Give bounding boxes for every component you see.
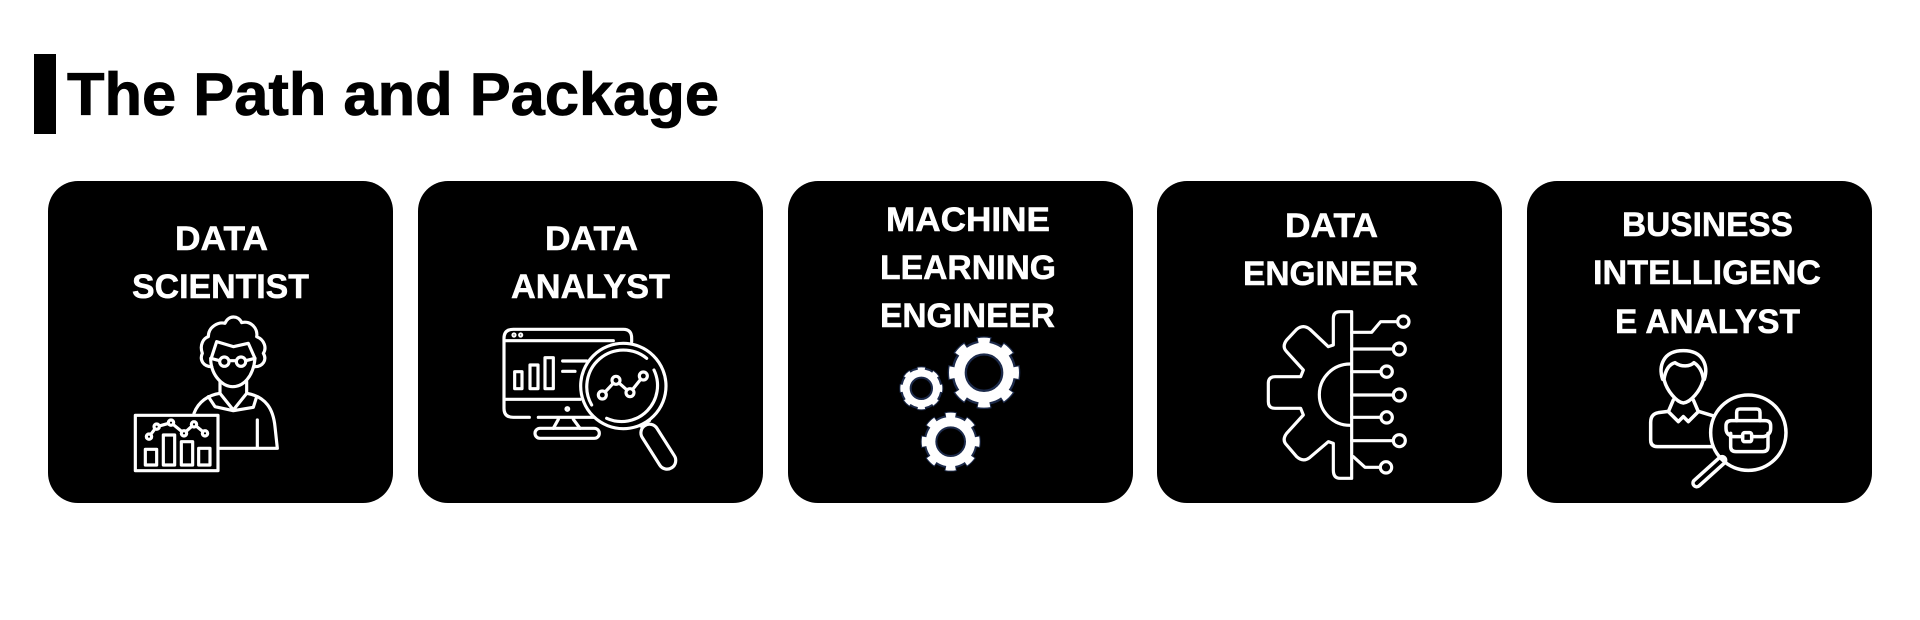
- card heading: [1593, 206, 1821, 341]
- card heading: [1243, 207, 1418, 293]
- panel: machine learning engineer: [788, 181, 1133, 503]
- card background: [418, 181, 763, 503]
- card heading: DATA: [545, 220, 638, 258]
- card heading: MACHINE: [886, 201, 1050, 239]
- icon: scientist with chart board: [135, 317, 277, 471]
- card heading: SCIENTIST: [132, 268, 309, 306]
- card heading: ENGINEER: [880, 297, 1055, 335]
- card heading: ENGINEER: [1243, 255, 1418, 293]
- title accent bar: [34, 54, 56, 134]
- card background: [1527, 181, 1872, 503]
- card heading: BUSINESS: [1622, 206, 1793, 244]
- card heading: ANALYST: [511, 268, 670, 306]
- card heading: LEARNING: [880, 249, 1056, 287]
- card heading: [132, 220, 309, 306]
- large gear: [952, 341, 1016, 404]
- card background: [788, 181, 1133, 503]
- small gear: [903, 370, 940, 407]
- card background: [48, 181, 393, 503]
- card heading: E ANALYST: [1615, 303, 1800, 341]
- card heading: [511, 220, 670, 306]
- panel: data engineer: [1157, 181, 1502, 503]
- panel: business intelligence analyst: [1527, 181, 1872, 503]
- card heading: [880, 201, 1056, 335]
- panel: data analyst: [418, 181, 763, 503]
- icon: three gears: [903, 341, 1016, 467]
- icon: monitor and magnifier: [504, 329, 679, 472]
- card heading: DATA: [175, 220, 268, 258]
- card background: [1157, 181, 1502, 503]
- title block: [34, 54, 719, 134]
- card heading: INTELLIGENC: [1593, 254, 1821, 292]
- icon: analyst with briefcase magnifier: [1651, 351, 1786, 488]
- heading: The Path and Package: [67, 61, 719, 128]
- bottom gear: [925, 416, 976, 467]
- icon: half gear with circuit: [1268, 312, 1409, 478]
- card heading: DATA: [1285, 207, 1378, 245]
- panel: data scientist: [48, 181, 393, 503]
